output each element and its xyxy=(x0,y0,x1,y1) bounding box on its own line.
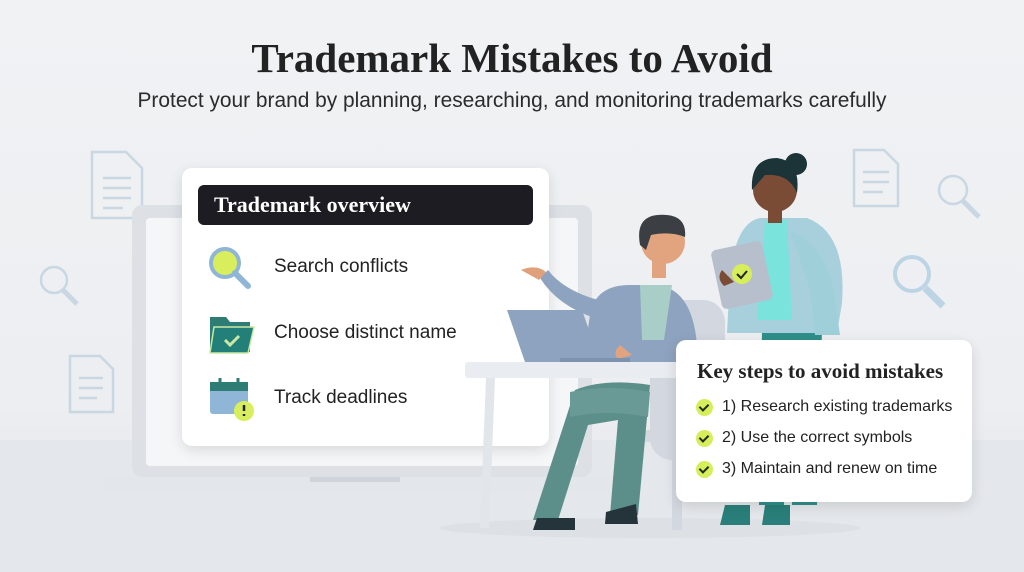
heading: Key steps to avoid mistakes xyxy=(697,359,943,383)
man upper body xyxy=(521,215,697,370)
woman xyxy=(710,153,843,525)
icon: calendar xyxy=(210,378,254,421)
man legs xyxy=(533,382,650,530)
step 1: 1) Research existing trademarks xyxy=(722,398,952,415)
icon: magnifier xyxy=(209,247,251,289)
laptop on desk xyxy=(507,310,600,362)
item: choose distinct name: Choose distinct name xyxy=(274,322,457,343)
desk xyxy=(465,362,700,528)
card: key steps xyxy=(676,340,972,502)
title: Trademark Mistakes to Avoid xyxy=(251,35,773,81)
icon: folder xyxy=(209,317,255,354)
step 2: 2) Use the correct symbols xyxy=(722,429,912,446)
subtitle: Protect your brand by planning, researching, and monitoring trademarks carefully xyxy=(138,89,886,112)
header bar: Trademark overview xyxy=(214,192,411,217)
step 3: 3) Maintain and renew on time xyxy=(722,460,937,477)
floor band xyxy=(0,440,1024,572)
item: search conflicts: Search conflicts xyxy=(274,256,408,277)
card: trademark overview xyxy=(182,168,549,446)
item: track deadlines: Track deadlines xyxy=(274,387,407,408)
header bar xyxy=(198,185,533,225)
chair xyxy=(620,300,730,530)
